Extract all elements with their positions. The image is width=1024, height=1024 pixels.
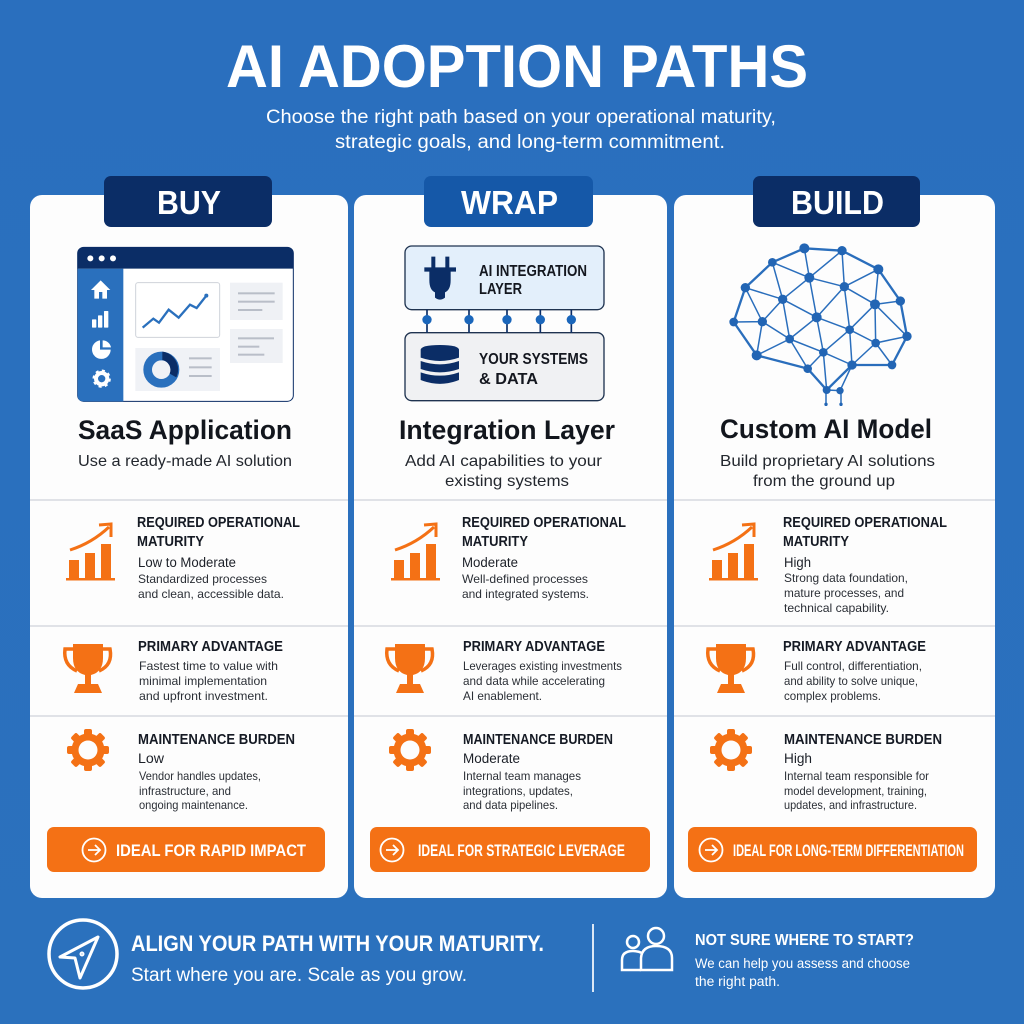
text: required operational maturity: MATURITY [137,534,204,550]
text: primary advantage [138,639,283,703]
panel: build [674,176,995,898]
subheading: build: Build proprietary AI solutions [720,453,935,470]
callout text: align: Start where you are. Scale as you grow. [131,965,467,986]
footer: not sure where to start [622,928,914,989]
text: maintenance burden [463,732,613,812]
text: maintenance burden: Moderate [463,751,520,766]
callout text: align [131,931,544,986]
text: primary advantage [463,639,622,703]
tab: build [753,176,920,227]
card background: wrap [354,195,667,898]
button: strategic leverage [370,827,650,872]
text: maintenance burden: model development, training, [784,784,927,798]
title: AI ADOPTION PATHS [226,33,808,100]
subheading: build: from the ground up [753,473,895,490]
icon: gear [67,729,109,771]
subheading: wrap [405,453,603,490]
text: required operational maturity: and integrated systems. [462,587,589,601]
text: maintenance burden: Internal team manages [463,769,581,783]
tab: buy: BUY [157,184,221,221]
subheading: buy: Use a ready-made AI solution [78,453,292,470]
subheading: wrap: Add AI capabilities to your [405,453,603,470]
tab: build: BUILD [791,184,884,221]
text: required operational maturity: REQUIRED OPERATIONAL [783,515,947,531]
icon: maturity chart [709,524,758,580]
panel: wrap [354,176,667,898]
text: maintenance burden: integrations, updates, [463,784,573,798]
text: primary advantage: PRIMARY ADVANTAGE [463,639,605,655]
card background: build [674,195,995,898]
text: maintenance burden: Low [138,751,164,766]
callout text: not sure: We can help you assess and choose [695,956,910,971]
text: maintenance burden: ongoing maintenance. [139,798,248,812]
card background: buy [30,195,348,898]
text: maintenance burden: MAINTENANCE BURDEN [463,732,613,748]
subtitle: strategic goals, and long-term commitment. [335,132,725,153]
callout text: not sure: NOT SURE WHERE TO START? [695,932,914,949]
text: primary advantage: Fastest time to value with [139,659,278,673]
text: required operational maturity: MATURITY [783,534,849,550]
text: required operational maturity: Low to Moderate [138,555,236,570]
heading: SaaS Application: SaaS Application [78,415,292,445]
subtitle: Choose the right path based on your operational maturity, [266,107,776,128]
callout text: not sure: the right path. [695,974,780,989]
icon: trophy [708,644,754,693]
text: required operational maturity: REQUIRED OPERATIONAL [462,515,626,531]
footer: align your path [49,920,544,988]
tab: wrap: WRAP [461,184,558,221]
icon: maturity chart [391,524,440,580]
text: required operational maturity: Strong data foundation, [784,571,908,585]
text: required operational maturity [462,515,626,601]
tab: wrap [424,176,593,227]
heading: Custom AI Model: Custom AI Model [720,414,932,444]
text: required operational maturity: MATURITY [462,534,528,550]
text: primary advantage: and data while accelerating [463,674,605,688]
illustration: integration layer: AI INTEGRATION [479,263,587,280]
text: primary advantage: AI enablement. [463,689,542,703]
text: required operational maturity: Moderate [462,555,518,570]
tab: buy [104,176,272,227]
panel: buy [30,176,348,898]
subtitle [266,107,776,153]
text: required operational maturity [137,515,300,601]
button: rapid impact [47,827,325,872]
text: maintenance burden: Internal team responsible for [784,769,929,783]
icon: maturity chart [66,524,115,580]
text: primary advantage [783,639,926,703]
illustration: neural brain [729,243,912,406]
text: primary advantage: and upfront investment. [139,689,268,703]
illustration: integration layer: YOUR SYSTEMS [479,351,588,368]
text: maintenance burden [784,732,942,812]
callout text: not sure [695,932,914,989]
heading: Integration Layer: Integration Layer [399,415,615,445]
text: primary advantage: Full control, differentiation, [784,659,922,673]
text: required operational maturity: REQUIRED OPERATIONAL [137,515,300,531]
icon: trophy [65,644,111,693]
illustration: SaaS dashboard [78,247,293,401]
text: primary advantage: complex problems. [784,689,881,703]
button: strategic leverage: IDEAL FOR STRATEGIC LEVERAGE [418,841,625,860]
text: primary advantage: and ability to solve unique, [784,674,918,688]
text: maintenance burden [138,732,295,812]
text: maintenance burden: infrastructure, and [139,784,231,798]
text: primary advantage: Leverages existing investments [463,659,622,673]
text: required operational maturity: High [784,555,811,570]
text: required operational maturity: Well-defined processes [462,572,588,586]
text: required operational maturity: Standardized processes [138,572,267,586]
text: required operational maturity: and clean, accessible data. [138,587,284,601]
subheading: build [720,453,935,490]
text: maintenance burden: MAINTENANCE BURDEN [138,732,295,748]
text: required operational maturity: technical capability. [784,601,889,615]
text: maintenance burden: MAINTENANCE BURDEN [784,732,942,748]
button: long-term differentiation [688,827,977,872]
text: maintenance burden: updates, and infrastructure. [784,798,917,812]
illustration: integration layer: & DATA [479,371,538,388]
icon: gear [710,729,752,771]
text: maintenance burden: and data pipelines. [463,798,558,812]
icon: trophy [387,644,433,693]
text: maintenance burden: Vendor handles updates, [139,769,261,783]
icon: people [622,928,672,970]
text: required operational maturity: mature processes, and [784,586,904,600]
subheading: wrap: existing systems [445,473,569,490]
icon: gear [389,729,431,771]
text: maintenance burden: High [784,751,812,766]
text: primary advantage: PRIMARY ADVANTAGE [138,639,283,655]
button: rapid impact: IDEAL FOR RAPID IMPACT [116,841,307,860]
illustration: integration layer [405,246,604,401]
text: primary advantage: PRIMARY ADVANTAGE [783,639,926,655]
text: required operational maturity [783,515,947,615]
illustration: integration layer: LAYER [479,281,522,298]
callout text: align: ALIGN YOUR PATH WITH YOUR MATURITY. [131,931,544,956]
text: primary advantage: minimal implementation [139,674,267,688]
icon: navigation compass [49,920,117,988]
